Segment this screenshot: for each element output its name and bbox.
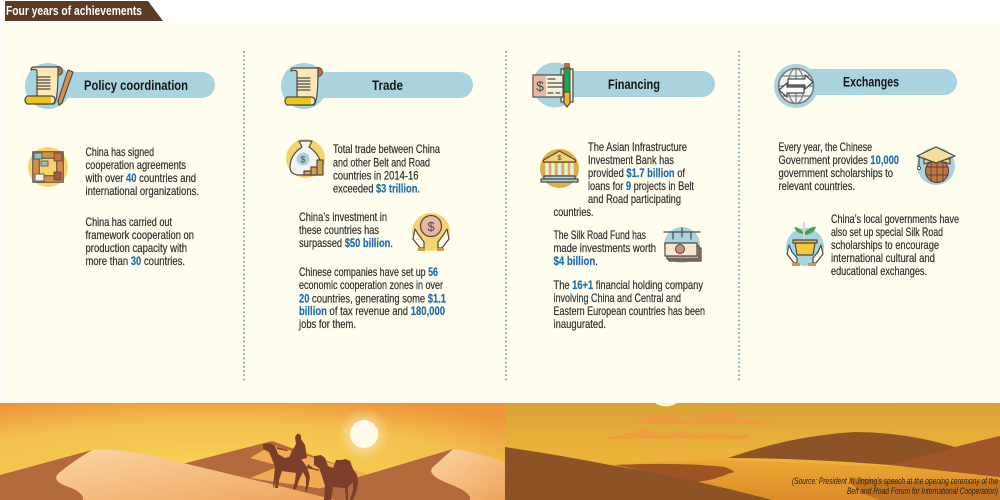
text: scholarships: relevant countries. [778,179,855,193]
text: total trade: Total trade between China [333,142,440,156]
sun [655,403,677,406]
clouds [605,411,773,439]
text: production capacity: framework cooperation on [86,228,194,242]
icon: cheque and pen: $ [536,78,544,94]
icon: graduation cap and globe [917,147,955,185]
icon: hands holding coin [412,213,450,251]
icon: linked hands [28,147,68,187]
text: cooperation zones: economic cooperation zones in over [299,278,443,292]
text: total trade [333,142,440,196]
text: total trade: and other Belt and Road [333,156,430,170]
camel with load [314,455,358,500]
text: investment [299,210,393,250]
icon: money bag and coins [286,139,325,178]
text: Silk Road Fund: made investments worth [554,241,656,255]
icon: hands holding plant [786,222,824,266]
text: cooperation agreements [85,145,199,198]
text: production capacity: China has carried out [86,215,172,229]
text: Silk Road Fund: $4 billion. [554,254,598,268]
text: production capacity [86,215,194,268]
panel: policy coordination [25,63,215,268]
text: cooperation zones [298,265,446,331]
heading pill: financing [532,62,715,108]
text: Silk Road scholarships: China’s local governments have [831,212,959,226]
text: 16+1 company: inaugurated. [554,317,606,331]
text: 16+1 company [554,278,705,331]
icon: bank building [540,149,579,188]
heading pill: exchanges [774,64,957,108]
divider: right [738,51,740,382]
icon: globe and arrows [778,68,814,104]
text: Silk Road scholarships: international cultural and [831,251,935,265]
text: total trade: exceeded $3 trillion. [333,182,420,196]
text: 16+1 company: involving China and Central and [554,291,681,305]
text: investment: surpassed $50 billion. [299,236,393,250]
panel: financing [532,62,715,331]
text: Silk Road scholarships [831,212,959,278]
illustration: desert with camels [0,403,505,500]
text: AIIB loans: countries. [554,205,594,219]
heading pill: exchanges: Exchanges [843,74,899,90]
text: 16+1 company: The 16+1 financial holding company [554,278,703,292]
text: AIIB loans [554,140,695,219]
text: AIIB loans: and Road participating [588,192,681,206]
text: cooperation agreements: international organizations. [86,184,199,198]
heading pill: trade: Trade [372,78,403,93]
text: investment: these countries has [299,223,379,237]
icon: scroll and pencil [25,66,73,105]
text: cooperation agreements: with over 40 countries and [85,171,196,185]
text: scholarships: Every year, the Chinese [778,140,872,154]
panel: exchanges [774,64,959,278]
title banner [5,1,163,21]
icon: bank building: $ [557,153,562,162]
camel with rider [263,434,319,493]
heading pill: financing: Financing [608,77,660,92]
icon: cheque and pen [533,63,573,107]
heading pill: policy coordination: Policy coordination [84,78,188,93]
icon: banknotes [664,227,701,263]
panel: trade [281,63,473,331]
text: scholarships: Government provides 10,000 [778,153,899,167]
text: Silk Road Fund [554,228,656,268]
text: AIIB loans: loans for 9 projects in Belt [588,179,695,193]
text: Silk Road scholarships: scholarships to encourage [831,238,939,252]
sun [338,408,390,460]
text: AIIB loans: The Asian Infrastructure [588,140,687,154]
text: Silk Road scholarships: also set up special Silk Road [831,225,943,239]
text: cooperation zones: billion of tax revenue and 180,000 [299,304,445,318]
text: investment: China’s investment in [299,210,387,224]
text: cooperation agreements: China has signed [86,145,154,159]
text: cooperation zones: Chinese companies have set up 56 [299,265,438,279]
text: scholarships: government scholarships to [778,166,893,180]
icon: hands holding coin: $ [427,219,435,234]
text: cooperation zones: 20 countries, generating some $1.1 [299,292,446,306]
divider: left [243,51,245,382]
text: scholarships [778,140,899,193]
text: cooperation agreements: cooperation agreements [86,158,186,172]
title banner: Four years of achievements [6,4,142,18]
text: AIIB loans: Investment Bank has [588,153,674,167]
source note [792,476,998,497]
divider: middle [505,51,507,382]
text: cooperation zones: jobs for them. [298,317,356,331]
background panel [1,24,1000,404]
heading pill: policy coordination [25,63,215,109]
text: AIIB loans: provided $1.7 billion of [588,166,686,180]
text: Silk Road Fund: The Silk Road Fund has [554,228,646,242]
text: production capacity: more than 30 countries. [86,254,185,268]
icon: scroll [285,68,322,105]
illustration: desert with river [505,403,1000,500]
text: production capacity: production capacity with [86,241,187,255]
icon: money bag and coins: $ [300,154,306,164]
heading pill: trade [281,63,473,109]
text: total trade: countries in 2014-16 [333,168,419,182]
text: 16+1 company: Eastern European countries has been [554,304,705,318]
text: Silk Road scholarships: educational exchanges. [831,264,927,278]
